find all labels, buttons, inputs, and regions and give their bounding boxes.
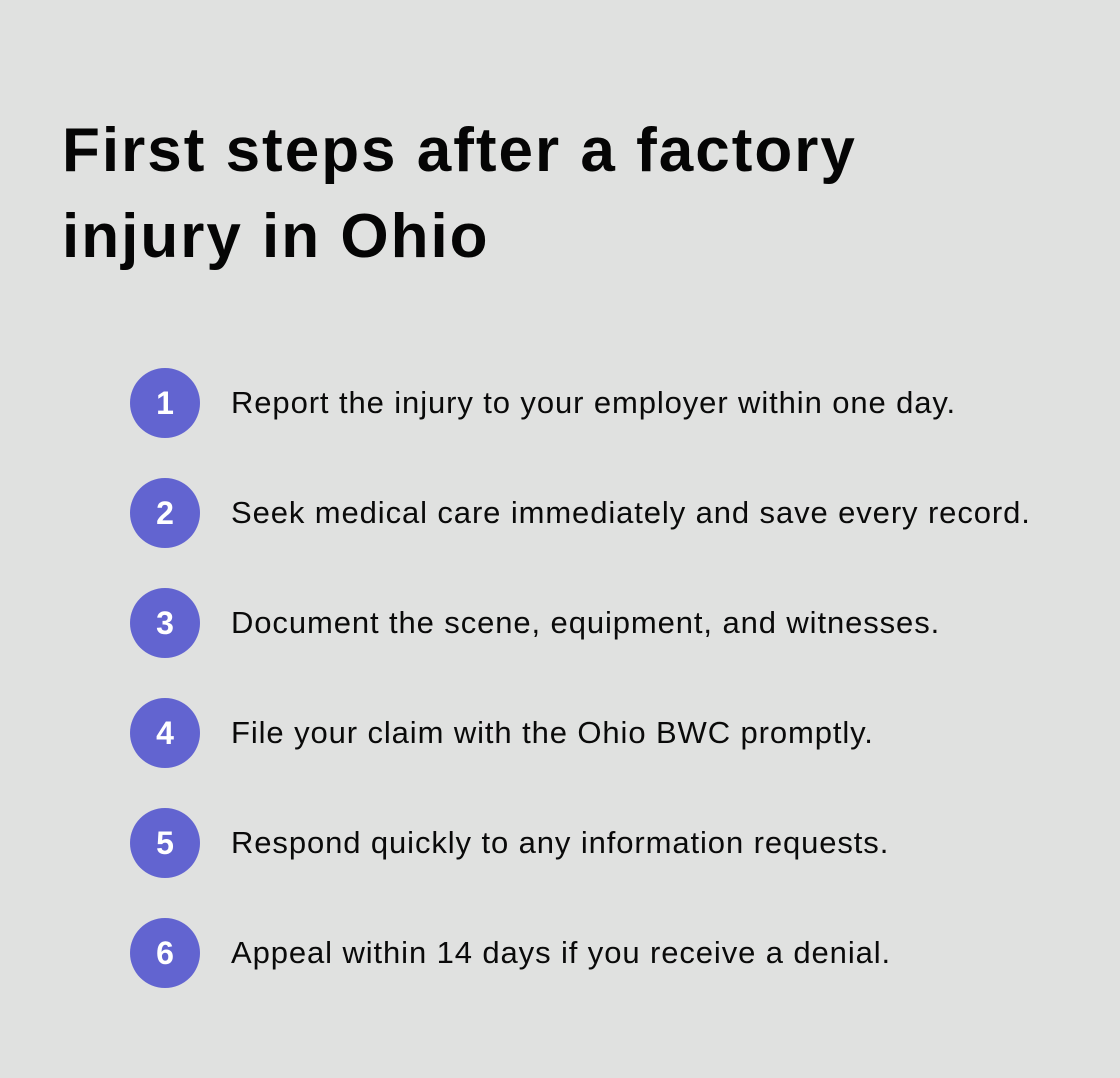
title: First steps after a factory — [62, 116, 857, 185]
step 2: Seek medical care immediately and save every record. — [231, 495, 1031, 530]
step 1: Report the injury to your employer within one day. — [231, 385, 956, 420]
step 1: 1 — [156, 385, 174, 421]
step 3: 3 — [156, 605, 174, 641]
step 5: 5 — [156, 825, 174, 861]
title — [62, 116, 857, 271]
step 6: Appeal within 14 days if you receive a denial. — [231, 935, 891, 970]
step 6: 6 — [156, 935, 174, 971]
step 2 — [130, 478, 1031, 548]
step 4: 4 — [156, 715, 174, 751]
step 5 — [130, 808, 889, 878]
step 3 — [130, 588, 940, 658]
step 4: File your claim with the Ohio BWC promptly. — [231, 715, 874, 750]
step 3: Document the scene, equipment, and witnesses. — [231, 605, 940, 640]
step 4 — [130, 698, 874, 768]
step 6 — [130, 918, 891, 988]
step 1 — [130, 368, 956, 438]
step 5: Respond quickly to any information requests. — [231, 825, 889, 860]
title: injury in Ohio — [62, 202, 490, 271]
step 2: 2 — [156, 495, 174, 531]
